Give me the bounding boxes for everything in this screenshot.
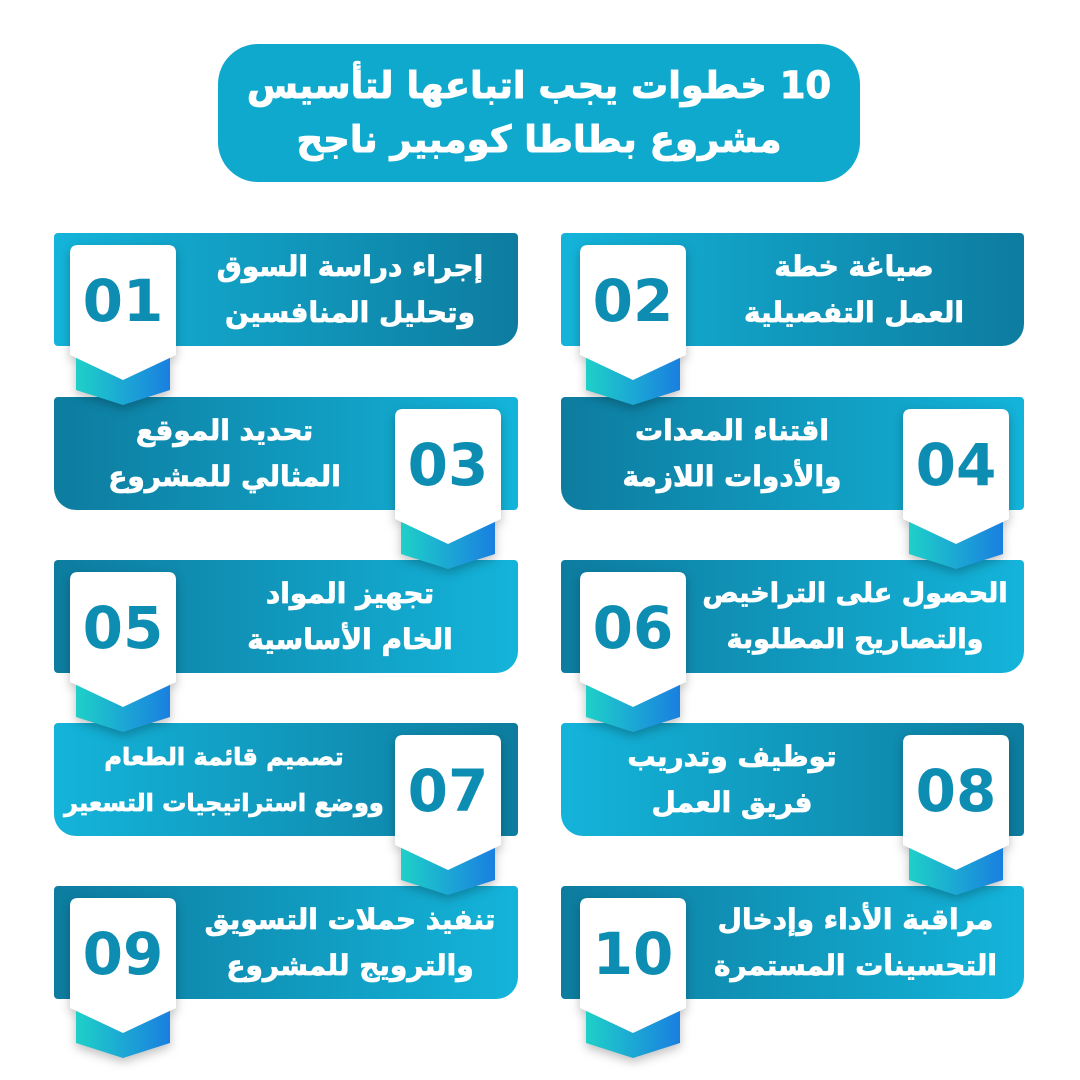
step 09: والترويج للمشروع: [226, 948, 474, 982]
step 08: 08: [916, 757, 996, 825]
step 01: 01: [83, 267, 163, 335]
step 07: ووضع استراتيجيات التسعير: [64, 788, 384, 816]
step 10: 10: [593, 920, 673, 988]
step 08: [561, 723, 1024, 903]
step 06: [561, 560, 1024, 740]
step 06: الحصول على التراخيص: [702, 578, 1008, 608]
step 04: والأدوات اللازمة: [623, 460, 841, 492]
step 02: 02: [593, 267, 673, 335]
step 03: المثالي للمشروع: [108, 460, 341, 492]
step 05: الخام الأساسية: [247, 622, 453, 656]
step 10: مراقبة الأداء وإدخال: [718, 902, 993, 936]
step 03: تحديد الموقع: [136, 414, 313, 446]
title: 10 خطوات يجب اتباعها لتأسيس: [247, 64, 831, 107]
title: [218, 44, 860, 182]
step 06: 06: [593, 594, 673, 662]
title: مشروع بطاطا كومبير ناجح: [296, 118, 782, 161]
step 04: اقتناء المعدات: [635, 414, 829, 446]
step 01: وتحليل المنافسين: [225, 296, 475, 328]
step 10: [561, 886, 1024, 1066]
step 07: 07: [408, 757, 488, 825]
step 06: والتصاريح المطلوبة: [727, 624, 983, 654]
step 09: تنفيذ حملات التسويق: [205, 902, 495, 936]
step 01: إجراء دراسة السوق: [217, 250, 483, 282]
step 02: [561, 233, 1024, 412]
step 05: تجهيز المواد: [266, 576, 434, 610]
step 05: 05: [83, 594, 163, 662]
step 08: فريق العمل: [652, 786, 812, 818]
step 10: التحسينات المستمرة: [714, 948, 997, 982]
step 05: [54, 560, 518, 740]
step 02: صياغة خطة: [774, 250, 934, 282]
step 07: [54, 723, 518, 903]
step 08: توظيف وتدريب: [627, 740, 837, 772]
step 09: 09: [83, 920, 163, 988]
step 02: العمل التفصيلية: [744, 296, 964, 328]
step 03: 03: [408, 431, 488, 499]
step 04: 04: [916, 431, 996, 499]
step 04: [561, 397, 1024, 577]
step 01: [54, 233, 518, 412]
step 07: تصميم قائمة الطعام: [104, 742, 344, 770]
step 03: [54, 397, 518, 577]
step 09: [54, 886, 518, 1066]
